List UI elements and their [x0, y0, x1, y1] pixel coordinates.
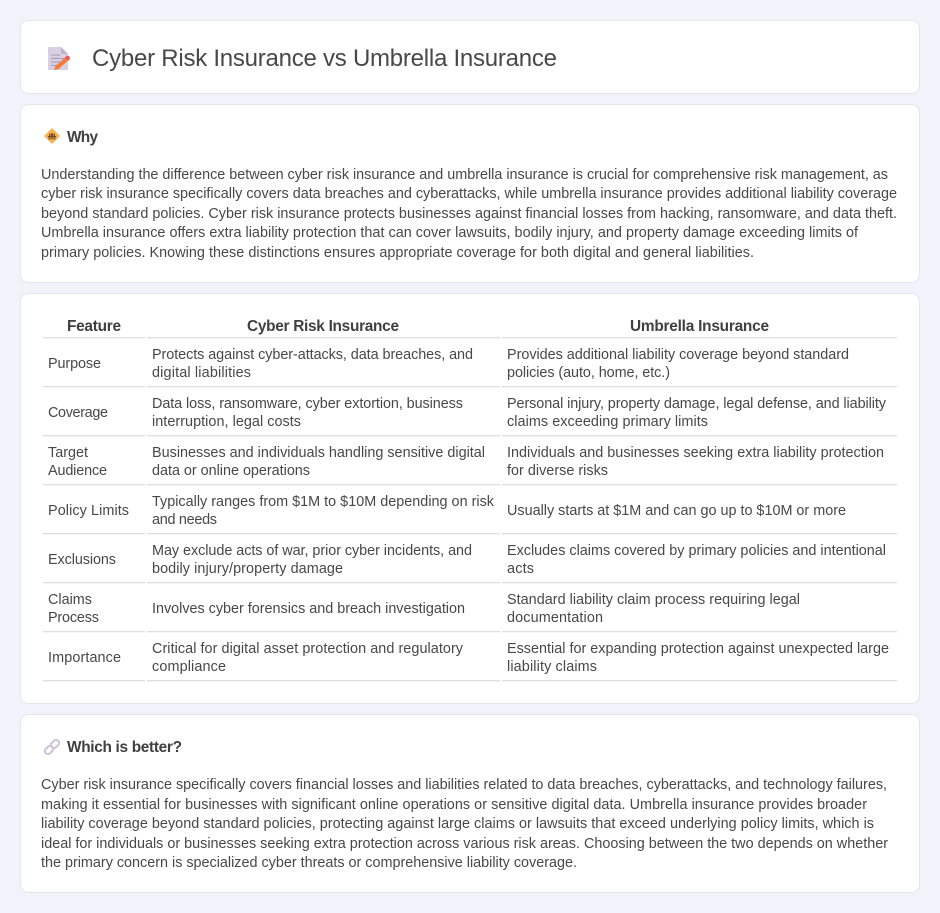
table header row: Cyber Risk Insurance [247, 318, 399, 335]
table row: importance: compliance [152, 659, 226, 675]
panel: comparison table [20, 294, 920, 704]
table header row: Umbrella Insurance [630, 318, 769, 335]
text block: why paragraph: Umbrella insurance offers extra liability protection that can cover lawsuits, bodily injury, and property damage exceeding limits of [41, 225, 859, 241]
table row: exclusions: Exclusions [48, 552, 116, 568]
table row: target audience: Businesses and individuals handling sensitive digital [152, 445, 485, 461]
table row: exclusions [48, 543, 886, 577]
table header row: Feature [67, 318, 121, 335]
table row: exclusions: acts [507, 561, 534, 577]
table row: purpose [48, 347, 849, 381]
icon: document with pencil [48, 47, 70, 70]
table row: importance [48, 641, 889, 675]
table header row [67, 318, 769, 335]
panel: why [20, 104, 920, 282]
table row: claims process: Standard liability claim process requiring legal [507, 592, 800, 608]
table row: purpose: Provides additional liability coverage beyond standard [507, 347, 849, 363]
table row: purpose: Protects against cyber-attacks, data breaches, and [152, 347, 473, 363]
heading: why: Why [67, 129, 98, 146]
table row: claims process: documentation [507, 610, 603, 626]
table row: coverage: Coverage [48, 405, 108, 421]
text block: why paragraph: beyond standard policies. Cyber risk insurance protects businesses against financial losses from hacking, ransomware, and data theft. [41, 206, 897, 222]
table row: policy limits: Usually starts at $1M and can go up to $10M or more [507, 503, 846, 519]
table row: exclusions: Excludes claims covered by primary policies and intentional [507, 543, 886, 559]
table row: purpose: Purpose [48, 356, 101, 372]
text block: which is better paragraph: ideal for individuals or businesses seeking extra protection across various risk areas. Choosing between the two depends on whether [41, 836, 888, 852]
text block: which is better paragraph: the primary concern is specialized cyber threats or comprehensive liability coverage. [41, 855, 577, 871]
table row: importance: Importance [48, 650, 121, 666]
icon: chain link [44, 739, 60, 755]
text block: why paragraph: primary policies. Knowing these distinctions ensures appropriate coverage for both digital and general liabilities. [41, 245, 754, 261]
table row: coverage: Data loss, ransomware, cyber extortion, business [152, 396, 463, 412]
text block: why paragraph: cyber risk insurance specifically covers data breaches and cyberattacks, while umbrella insurance provides additional liability coverage [41, 186, 897, 202]
table row: exclusions: May exclude acts of war, prior cyber incidents, and [152, 543, 472, 559]
heading: page title: Cyber Risk Insurance vs Umbrella Insurance [92, 45, 557, 72]
table row: purpose: policies (auto, home, etc.) [507, 365, 670, 381]
table row: claims process: Involves cyber forensics and breach investigation [152, 601, 465, 617]
panel: which is better [20, 714, 920, 892]
table row: claims process: Claims [48, 592, 92, 608]
table row: target audience: Target [48, 445, 88, 461]
text block: which is better paragraph: Cyber risk insurance specifically covers financial losses and liabilities related to data breaches, cyberattacks, and technology failures, [41, 777, 887, 793]
table row: coverage: interruption, legal costs [152, 414, 301, 430]
table row: claims process [48, 592, 800, 626]
table row: importance: Critical for digital asset protection and regulatory [152, 641, 464, 657]
table row: target audience: Audience [48, 463, 107, 479]
table row: policy limits: Typically ranges from $1M to $10M depending on risk [152, 494, 495, 510]
table row: policy limits [48, 494, 846, 528]
table row: target audience: data or online operations [152, 463, 310, 479]
text block: which is better paragraph: liability coverage beyond standard policies, protecting against large claims or lawsuits that exceed underlying policy limits, which is [41, 816, 874, 832]
table row: policy limits: and needs [152, 512, 217, 528]
table row: exclusions: bodily injury/property damage [152, 561, 343, 577]
table row: claims process: Process [48, 610, 99, 626]
text block: why paragraph [41, 167, 897, 261]
table row: policy limits: Policy Limits [48, 503, 129, 519]
table row: target audience [48, 445, 884, 479]
table row: coverage [48, 396, 887, 430]
table row: coverage: Personal injury, property damage, legal defense, and liability [507, 396, 887, 412]
table row: purpose: digital liabilities [152, 365, 251, 381]
table row: importance: liability claims [507, 659, 597, 675]
text block: which is better paragraph [41, 777, 888, 871]
table row: target audience: Individuals and businesses seeking extra liability protection [507, 445, 884, 461]
heading: which is better: Which is better? [67, 739, 182, 756]
table row: coverage: claims exceeding primary limits [507, 414, 708, 430]
text block: why paragraph: Understanding the difference between cyber risk insurance and umbrella insurance is crucial for comprehensive risk management, as [41, 167, 888, 183]
table row: importance: Essential for expanding protection against unexpected large [507, 641, 889, 657]
panel: title [20, 20, 920, 94]
table row: target audience: for diverse risks [507, 463, 608, 479]
icon: warning diamond [44, 128, 60, 144]
text block: which is better paragraph: making it essential for businesses with significant online operations or sensitive digital data. Umbrella insurance provides broader [41, 797, 867, 813]
